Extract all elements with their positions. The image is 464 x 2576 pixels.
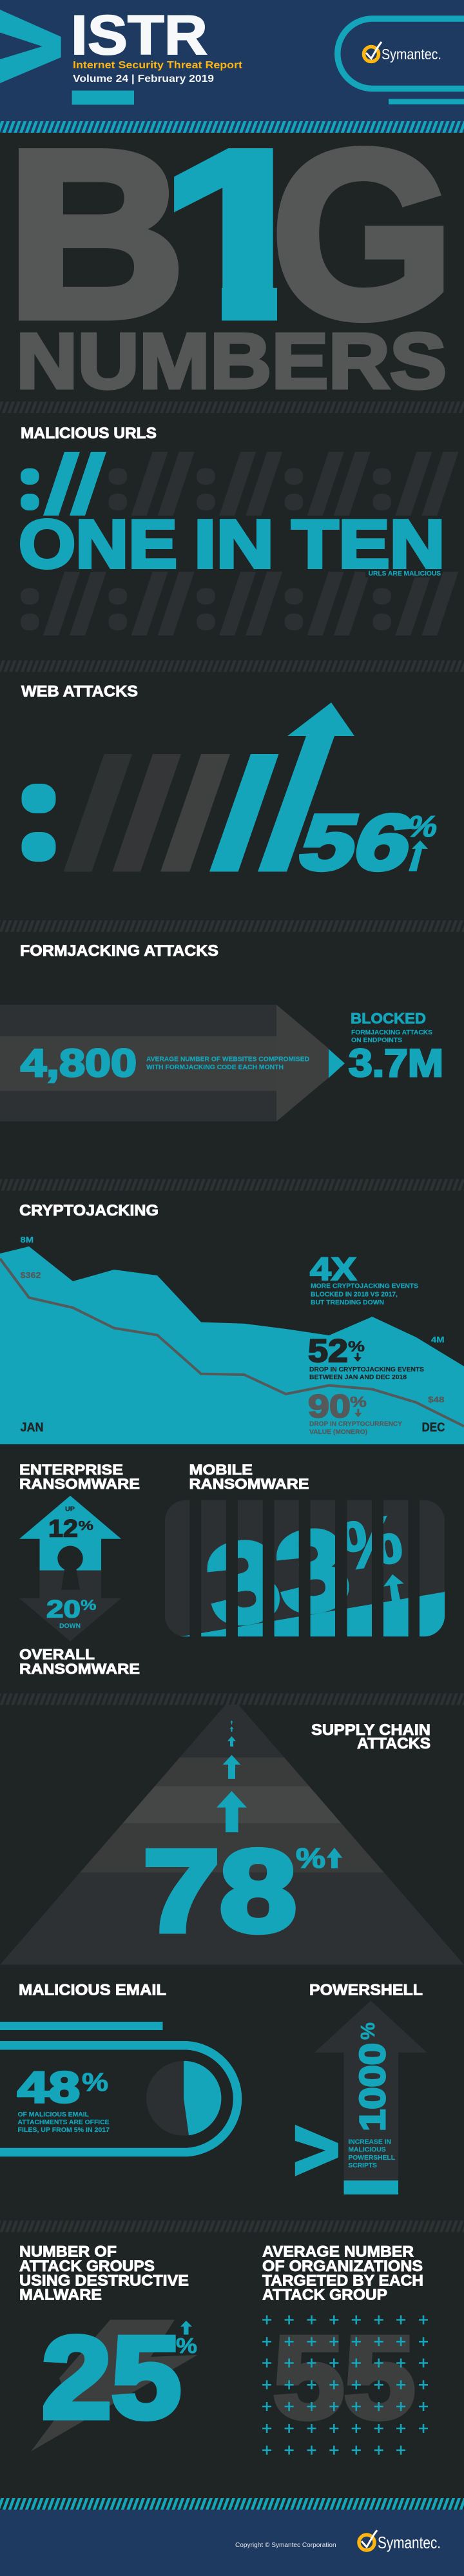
wedge <box>181 1592 445 1636</box>
heading: MALWARE <box>19 2287 102 2304</box>
plus grid <box>262 2315 428 2455</box>
icon: rising arrow <box>258 702 354 871</box>
panel: powershell <box>295 1982 427 2194</box>
heading: MALICIOUS EMAIL <box>19 1982 166 1999</box>
icon: chevron <box>0 10 61 83</box>
description: SCRIPTS <box>348 2162 377 2169</box>
stat 90%: % <box>350 1393 367 1410</box>
number 33: 33 <box>198 1504 358 1651</box>
icon: colon dots <box>22 784 55 862</box>
arrow base <box>344 2180 398 2194</box>
stat 52%: 52 <box>308 1333 348 1369</box>
divider <box>0 402 464 413</box>
heading: RANSOMWARE <box>19 1476 140 1492</box>
label $48: $48 <box>428 1395 445 1404</box>
description: OF MALICIOUS EMAIL <box>18 2111 90 2118</box>
panel: enterprise and overall ransomware <box>19 1462 140 1677</box>
title: B1G NUMBERS <box>19 146 445 391</box>
logo: Symantec <box>359 2530 441 2552</box>
stat 52%: DROP IN CRYPTOJACKING EVENTS <box>309 1366 424 1373</box>
heading: RANSOMWARE <box>189 1476 309 1492</box>
percent: % <box>356 2022 379 2040</box>
icon: chevron <box>295 2125 338 2176</box>
stat 90%: VALUE (MONERO) <box>309 1428 367 1436</box>
description <box>146 1056 309 1071</box>
number 20: 20 <box>46 1596 81 1623</box>
area chart: events <box>0 1246 464 1444</box>
label DEC: DEC <box>421 1421 445 1435</box>
pyramid <box>0 1705 464 1965</box>
footer band <box>0 2498 464 2576</box>
stat 4X: 4X <box>310 1251 356 1287</box>
divider <box>0 920 464 932</box>
icon: arrow <box>327 1848 342 1868</box>
icon: small up arrow <box>383 1574 404 1601</box>
divider: teal stripes <box>0 121 464 133</box>
divider <box>0 1179 464 1191</box>
label 4M: 4M <box>431 1335 445 1344</box>
heading overall: RANSOMWARE <box>19 1661 140 1677</box>
heading <box>262 2243 423 2304</box>
heading: POWERSHELL <box>309 1982 423 1999</box>
logo: Symantec <box>363 42 441 63</box>
number 1000: 1000 <box>352 2043 392 2131</box>
icon: keyhole <box>57 1545 83 1590</box>
word NUMBERS: NUMBERS <box>16 317 447 405</box>
percent: % <box>79 1519 93 1533</box>
percent: % <box>82 2068 108 2097</box>
label JAN: JAN <box>21 1421 44 1435</box>
prison bars <box>189 1498 420 1638</box>
panel: mobile ransomware <box>165 1462 445 1651</box>
percent: % <box>81 1597 97 1613</box>
label UP: UP <box>65 1506 75 1513</box>
description: WITH FORMJACKING CODE EACH MONTH <box>146 1063 284 1071</box>
blocked caption <box>351 1029 432 1044</box>
divider <box>0 660 464 672</box>
heading: TARGETED BY EACH <box>262 2272 423 2289</box>
blocked caption: ON ENDPOINTS <box>351 1036 402 1044</box>
number 25: 25 <box>42 2313 181 2443</box>
panel: organizations targeted <box>262 2243 428 2455</box>
big text: TEN <box>291 507 445 583</box>
large arrow <box>0 1005 329 1121</box>
heading: WEB ATTACKS <box>21 683 138 700</box>
header band <box>0 0 464 133</box>
logo: Symantec: Symantec. <box>378 2533 441 2552</box>
digit 1: 1 <box>159 101 322 367</box>
pill outline <box>338 19 464 89</box>
pattern of URL slashes <box>21 452 458 635</box>
label 8M: 8M <box>21 1235 34 1244</box>
panel: web attacks <box>21 683 441 887</box>
divider <box>0 2221 464 2232</box>
heading: FORMJACKING ATTACKS <box>20 942 218 960</box>
icon: up arrow <box>19 1496 121 1571</box>
divider <box>0 1694 464 1705</box>
volume line: Volume 24 | February 2019 <box>73 73 214 84</box>
panel: malicious email <box>0 1982 237 2153</box>
stat 4X <box>310 1251 418 1306</box>
number 48: 48 <box>17 2063 80 2112</box>
heading: ATTACK GROUPS <box>19 2258 155 2275</box>
stat 52% <box>308 1333 424 1381</box>
caption: URLS ARE MALICIOUS <box>369 570 441 577</box>
heading: ENTERPRISE <box>19 1462 123 1478</box>
number 78: 78 <box>143 1826 296 1956</box>
caption backing <box>365 569 441 577</box>
label DOWN: DOWN <box>59 1622 81 1630</box>
number 4,800: 4,800 <box>21 1041 137 1085</box>
stat 52%: % <box>348 1338 365 1355</box>
number 12: 12 <box>48 1516 78 1543</box>
heading <box>311 1721 430 1752</box>
big text: ONE <box>19 507 177 583</box>
blocked heading: BLOCKED <box>351 1010 426 1027</box>
panel: supply chain attacks <box>0 1705 464 1965</box>
accent bar right <box>389 99 464 104</box>
heading overall <box>19 1646 140 1677</box>
icon: arrow <box>180 2321 192 2334</box>
blocked caption: FORMJACKING ATTACKS <box>351 1029 432 1036</box>
description <box>18 2111 110 2134</box>
description: FILES, UP FROM 5% IN 2017 <box>18 2126 110 2134</box>
description: ATTACHMENTS ARE OFFICE <box>18 2118 110 2126</box>
heading: OF ORGANIZATIONS <box>262 2258 423 2275</box>
stat 90%: 90 <box>308 1388 351 1424</box>
stat 52%: BETWEEN JAN AND DEC 2018 <box>309 1373 407 1381</box>
number 56: 56 <box>291 799 422 887</box>
line chart: Monero value <box>0 1259 464 1426</box>
heading <box>19 2243 189 2304</box>
heading: USING DESTRUCTIVE <box>19 2272 189 2289</box>
stat 90% <box>308 1388 402 1436</box>
heading: ATTACK GROUP <box>262 2287 387 2304</box>
heading: SUPPLY CHAIN <box>311 1721 430 1739</box>
heading: ATTACKS <box>357 1735 430 1752</box>
percent: % <box>296 1843 325 1874</box>
letter G: G <box>271 101 454 367</box>
percent: % <box>176 2334 197 2358</box>
description: POWERSHELL <box>348 2154 396 2162</box>
teal stripes <box>0 2498 464 2510</box>
logo: Symantec: Symantec. <box>382 46 441 63</box>
stat 4X: BLOCKED IN 2018 VS 2017, <box>311 1291 398 1299</box>
copyright: Copyright © Symantec Corporation <box>235 2542 336 2549</box>
panel: destructive malware <box>19 2243 198 2452</box>
percent sign: % <box>404 810 441 843</box>
heading <box>189 1462 309 1492</box>
number 55: 55 <box>273 2313 415 2443</box>
number 3.7M: 3.7M <box>349 1041 443 1085</box>
large up arrow <box>314 2000 427 2180</box>
panel: cryptojacking <box>0 1202 464 1444</box>
label $362: $362 <box>21 1270 41 1280</box>
stat 4X: MORE CRYPTOJACKING EVENTS <box>311 1283 418 1290</box>
slashes <box>64 754 278 871</box>
accent bar <box>0 2022 162 2030</box>
icon: lightning bolt <box>31 2320 198 2452</box>
icon: teal URL slashes <box>21 452 106 516</box>
heading: MOBILE <box>189 1462 253 1478</box>
big text: IN <box>194 507 274 583</box>
description: INCREASE IN <box>348 2138 391 2146</box>
heading: NUMBER OF <box>19 2243 117 2261</box>
pill outline <box>0 2046 237 2153</box>
subtitle: Internet Security Threat Report <box>73 60 242 71</box>
panel: formjacking attacks <box>0 942 443 1121</box>
description: AVERAGE NUMBER OF WEBSITES COMPROMISED <box>146 1056 309 1063</box>
stat 4X: BUT TRENDING DOWN <box>311 1299 384 1306</box>
stat 90%: DROP IN CRYPTOCURRENCY <box>309 1420 402 1428</box>
description: MALICIOUS <box>348 2146 386 2154</box>
title: ISTR: ISTR <box>71 5 208 66</box>
rounded backing <box>165 1500 445 1636</box>
heading: AVERAGE NUMBER <box>262 2243 414 2261</box>
accent bar <box>72 90 134 104</box>
icon: teal arrow tip <box>329 1049 345 1078</box>
icon: down arrow <box>19 1571 121 1641</box>
icon: ascending arrows <box>217 1720 247 1832</box>
heading: CRYPTOJACKING <box>19 1202 159 1219</box>
icon: small arrow <box>409 840 428 871</box>
heading <box>19 1462 140 1492</box>
letter B: B <box>6 101 186 367</box>
percent: % <box>335 1501 407 1585</box>
heading: MALICIOUS URLS <box>21 425 157 442</box>
pie chart <box>146 2061 221 2136</box>
panel: malicious URLs <box>19 425 458 635</box>
big text <box>19 507 445 583</box>
description <box>348 2138 396 2169</box>
heading overall: OVERALL <box>19 1646 95 1663</box>
